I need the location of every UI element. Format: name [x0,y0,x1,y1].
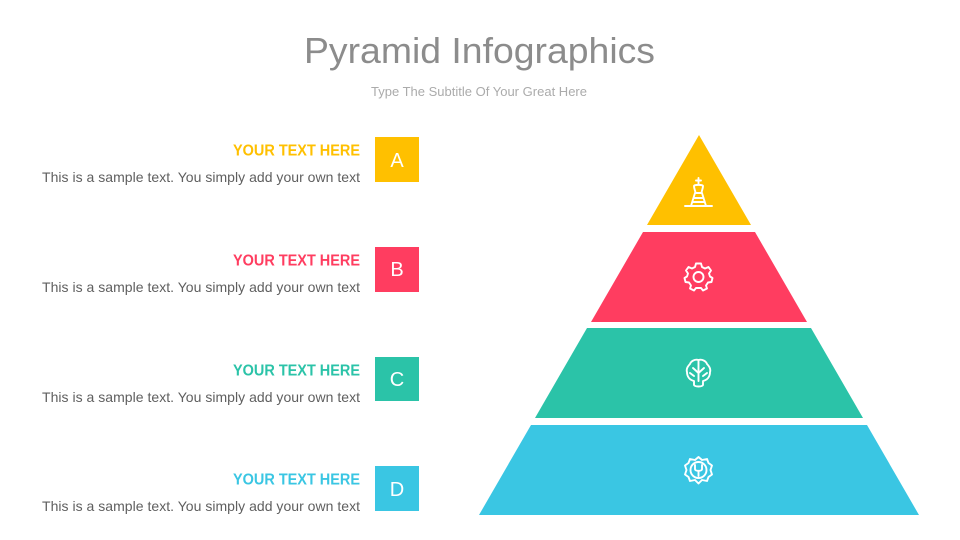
pyramid tier 4 [479,425,919,515]
item D [42,466,419,514]
badge D: D [390,479,404,501]
badge A: A [390,150,404,172]
title: Pyramid Infographics [304,30,655,71]
heading C: YOUR TEXT HERE [233,362,360,380]
body text B: This is a sample text. You simply add your own text [42,279,360,295]
body text A: This is a sample text. You simply add your own text [42,169,360,185]
icon: gear [684,264,712,290]
heading D: YOUR TEXT HERE [233,472,360,488]
heading B: YOUR TEXT HERE [233,252,360,270]
badge C [375,357,419,401]
pyramid tier 1 [647,135,751,225]
pyramid tier 2 [591,232,807,322]
icon: wrench gear [685,457,712,484]
badge B: B [390,259,404,281]
badge C: C [390,369,404,391]
badge A [375,137,419,182]
pyramid tier 3 [535,328,863,418]
body text C: This is a sample text. You simply add your own text [42,389,360,405]
body text D: This is a sample text. You simply add your own text [42,498,360,514]
badge B [375,247,419,292]
heading A: YOUR TEXT HERE [233,142,360,160]
item B [42,247,419,295]
subtitle: Type The Subtitle Of Your Great Here [371,84,587,99]
item A [42,137,419,185]
item C [42,357,419,405]
icon: brain bulb [687,360,710,386]
icon: chess king [685,178,712,206]
badge D [375,466,419,511]
